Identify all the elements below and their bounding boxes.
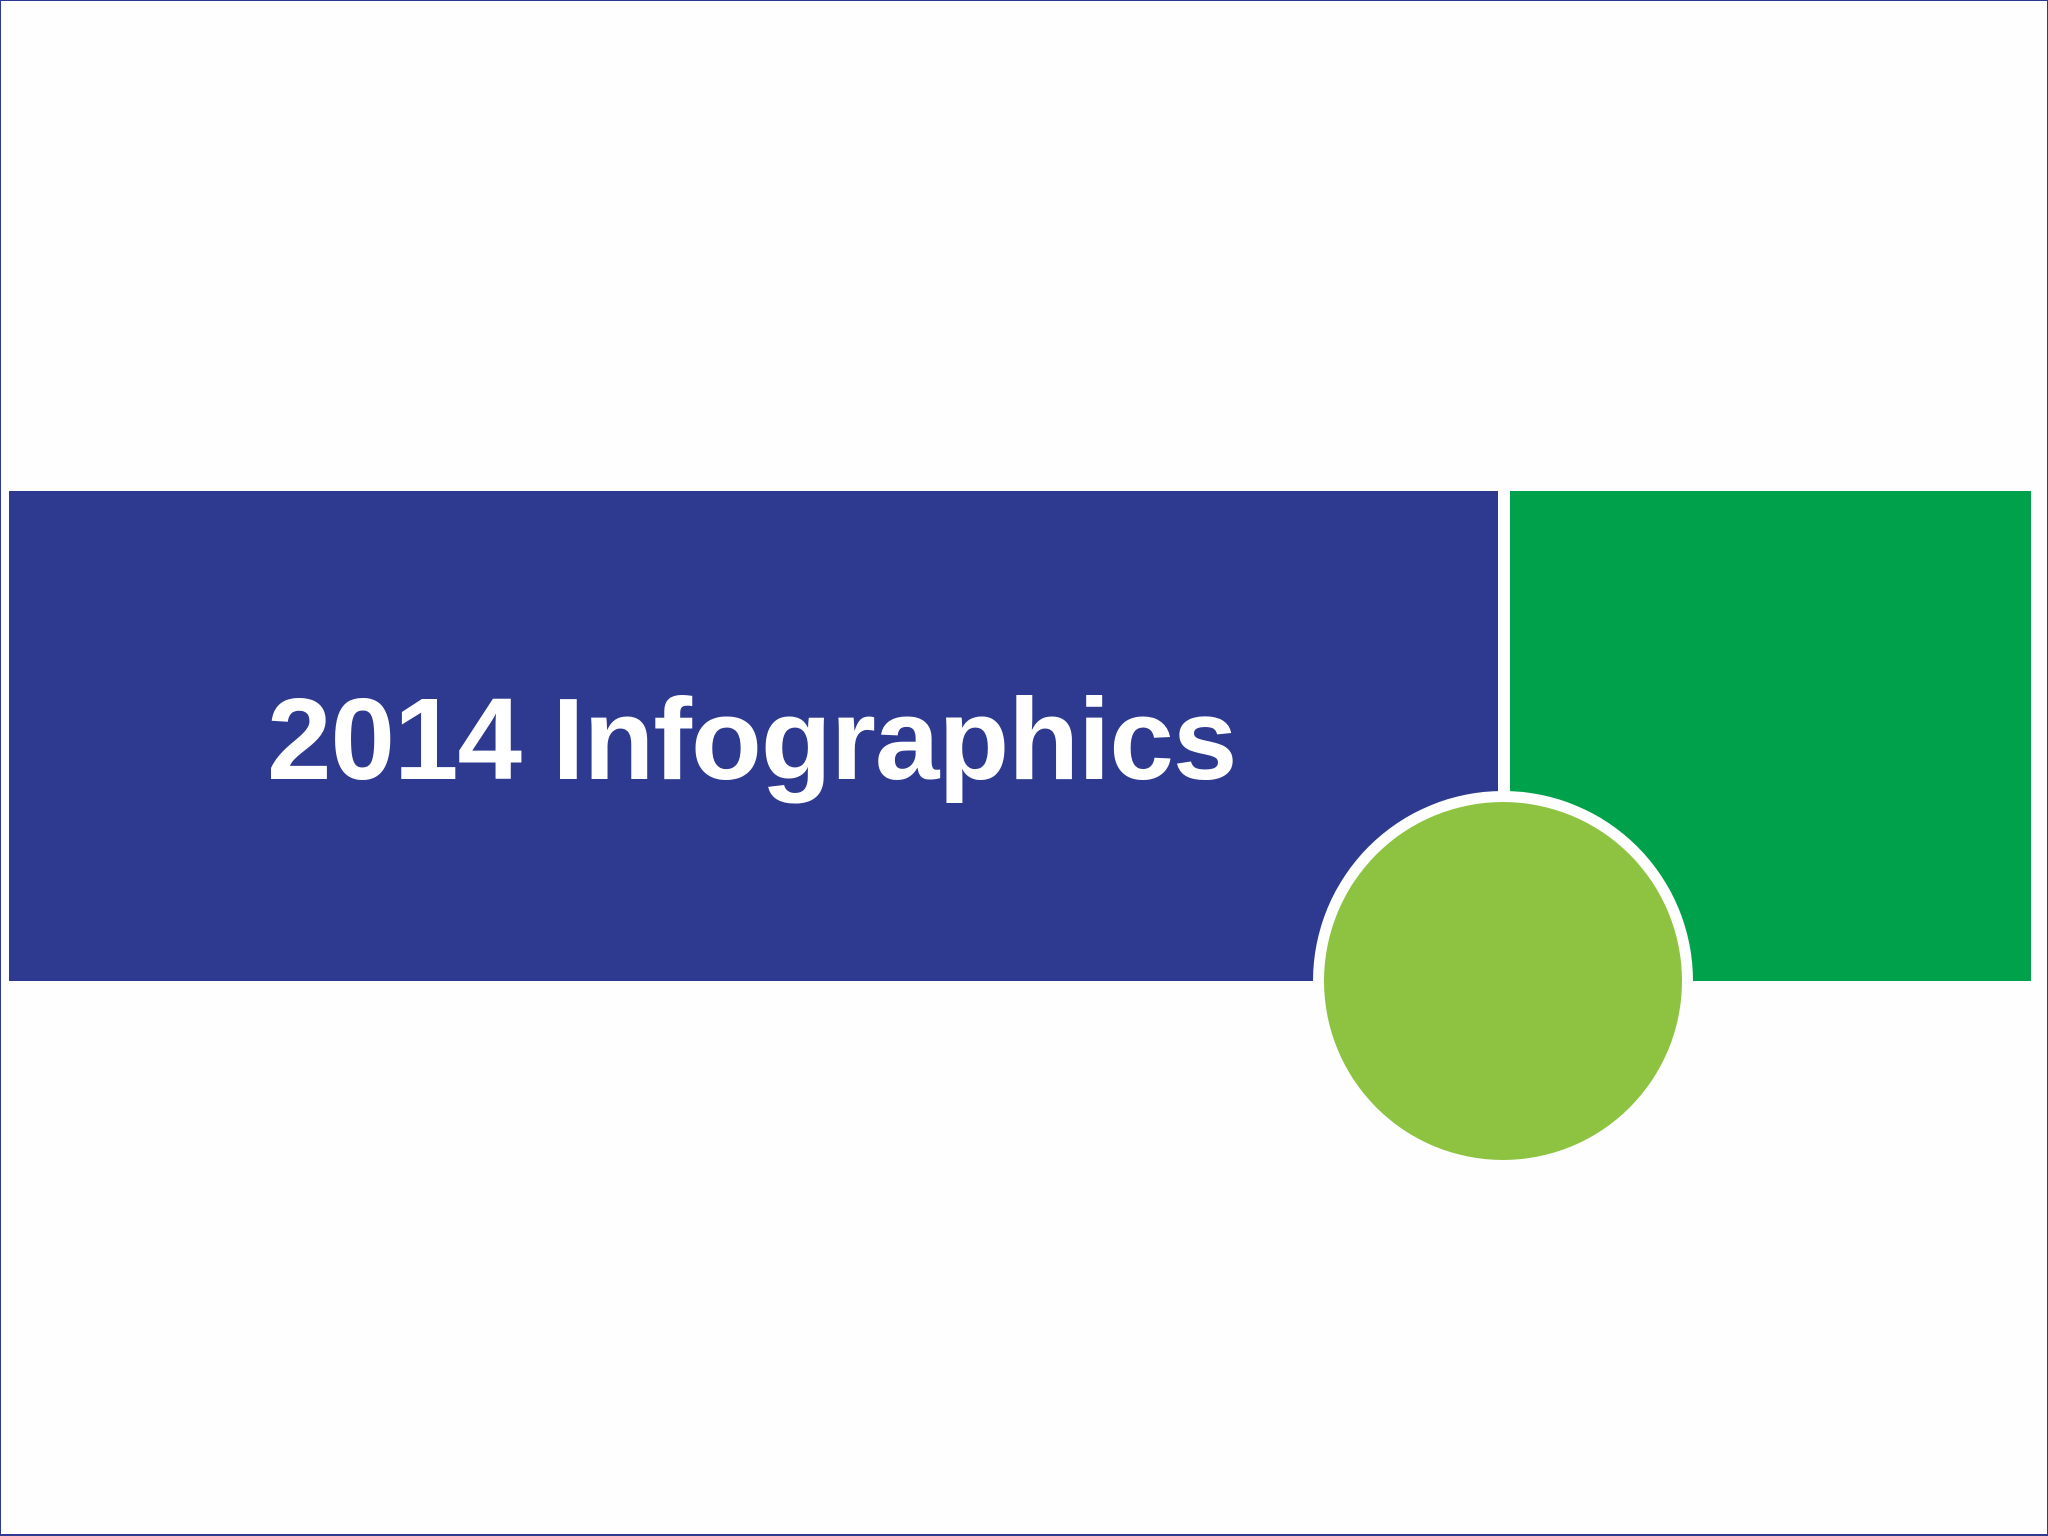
panel: blue title band	[9, 491, 1498, 981]
circle ring: white outline	[1313, 791, 1693, 1171]
panel: green block	[1510, 491, 2031, 981]
circle: green accent	[1324, 802, 1682, 1160]
title: 2014 Infographics	[267, 674, 1236, 804]
